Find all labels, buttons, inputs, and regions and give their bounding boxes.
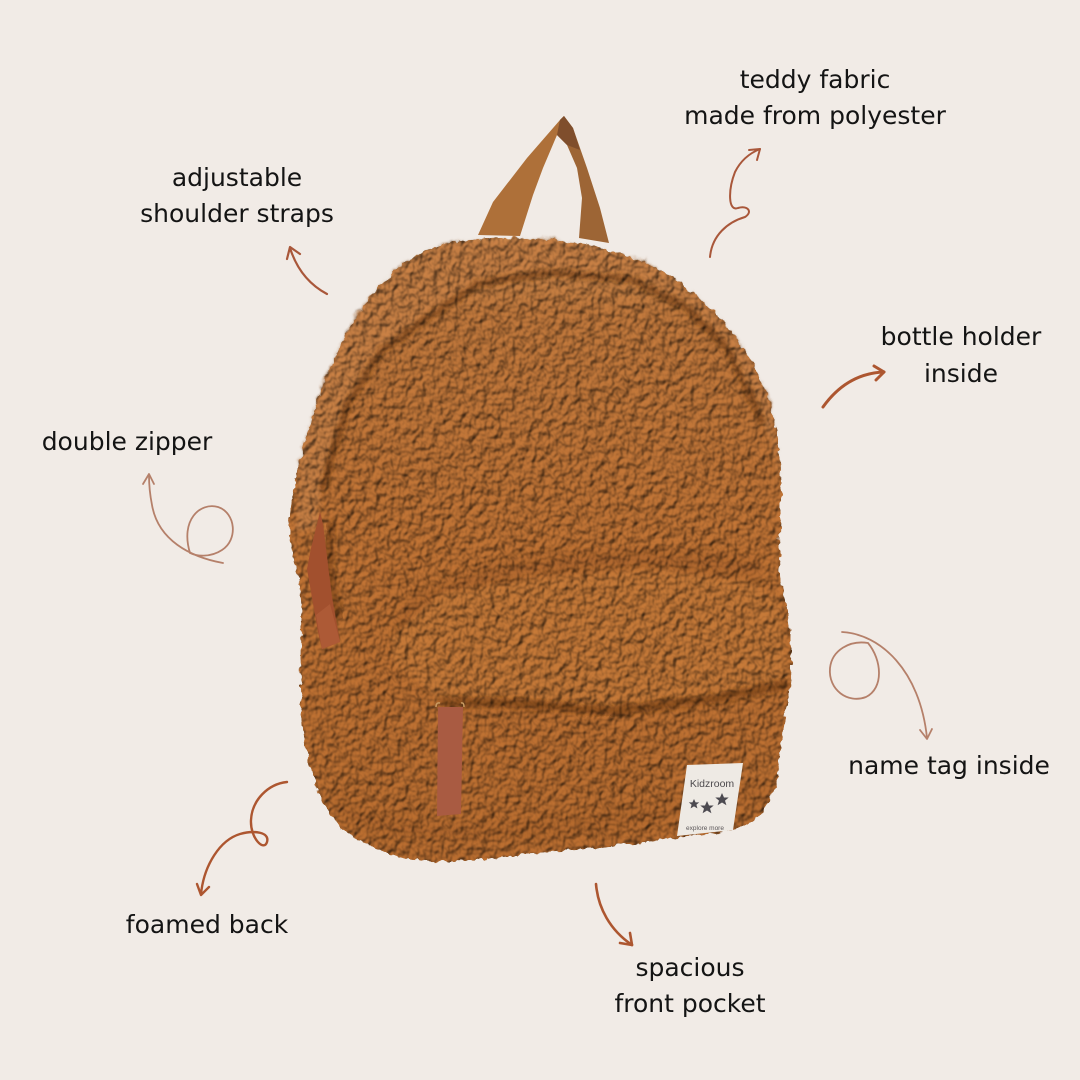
arrow: double zipper <box>143 474 233 563</box>
left side shade under zipper <box>329 520 340 620</box>
label: adjustable shoulder straps: shoulder straps <box>140 199 334 228</box>
arrow: front pocket <box>596 884 632 945</box>
arrow: name tag <box>830 632 932 739</box>
brand label <box>677 763 743 836</box>
pocket underside shadow <box>440 684 788 711</box>
side zipper pull <box>307 512 340 649</box>
brand label: explore more <box>686 825 724 832</box>
arrow: bottle holder <box>823 366 884 407</box>
label: spacious front pocket: spacious <box>635 953 745 982</box>
label: foamed back: foamed back <box>126 910 289 939</box>
label: name tag: name tag inside <box>848 751 1050 780</box>
top carry handle <box>478 116 609 243</box>
label: bottle holder: inside <box>924 359 998 388</box>
lower edge shade <box>330 790 770 833</box>
label: adjustable shoulder straps: adjustable <box>172 163 302 192</box>
label: bottle holder: bottle holder <box>881 322 1042 351</box>
rim seam shadow <box>322 273 763 490</box>
brand label: Kidzroom <box>690 778 734 790</box>
pocket flap <box>390 569 790 707</box>
label: teddy fabric: made from polyester <box>684 101 947 130</box>
teddy body <box>290 238 791 861</box>
top rim band <box>296 238 781 530</box>
label: spacious front pocket: front pocket <box>614 989 766 1018</box>
backpack <box>290 116 791 861</box>
arrow: teddy fabric <box>710 149 760 257</box>
label: double zipper: double zipper <box>42 427 213 456</box>
shade above pocket <box>400 560 760 625</box>
front zipper pull <box>436 703 464 816</box>
arrow: shoulder straps <box>287 247 327 294</box>
arrow: foamed back <box>197 782 287 895</box>
label: teddy fabric: teddy fabric <box>740 65 890 94</box>
